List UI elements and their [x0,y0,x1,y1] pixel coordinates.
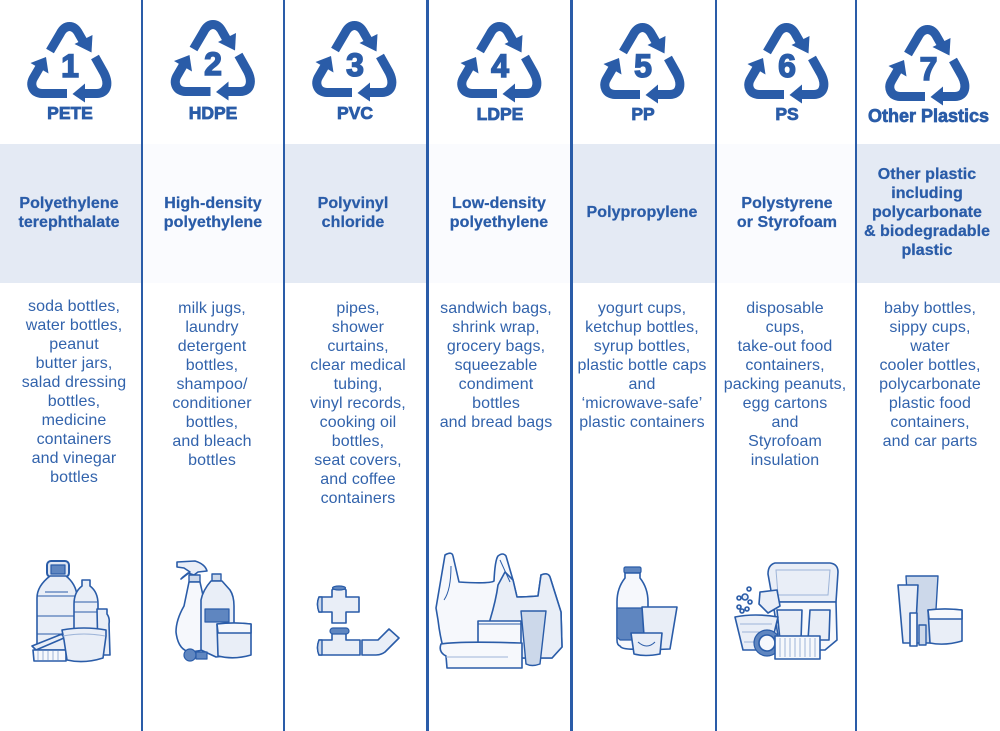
name: Low-density polyethylene: Low-density [452,195,546,212]
uses: column 3: cooking oil [320,414,396,431]
uses: column 3 [310,300,406,507]
name: Other plastic: Other plastic [878,166,976,183]
uses: column 5: plastic containers [579,414,705,431]
uses: column 2: and bleach [172,433,252,450]
uses: column 2: conditioner [172,395,252,412]
uses: column 4: sandwich bags, [440,300,552,317]
code 2 HDPE [174,24,250,123]
name: Polyethylene terephthalate: Polyethylene [19,195,119,212]
uses: column 4: shrink wrap, [452,319,540,336]
uses: column 4: and bread bags [440,414,552,431]
name: Other plastic [864,166,990,259]
uses: column 5: ketchup bottles, [585,319,699,336]
band: column 1 name background [0,144,142,283]
code 2 HDPE: HDPE [189,103,237,123]
uses: column 7 [879,300,981,450]
uses: column 6: containers, [745,357,825,374]
name: Polyvinyl chloride [318,195,388,231]
name: Low-density polyethylene [450,195,548,231]
uses: column 7: cooler bottles, [879,357,981,374]
code 4 LDPE: 4 [491,48,509,84]
name: Polystyrene or Styrofoam: or Styrofoam [737,214,837,231]
name: High-density polyethylene [164,195,262,231]
uses: column 1: salad dressing [22,374,126,391]
name: Other plastic: including [891,185,963,202]
name: Polyethylene terephthalate: terephthalate [18,214,120,231]
illustration: PVC pipes [318,586,399,655]
code 3 PVC [316,26,392,123]
uses: column 6: disposable [746,300,824,317]
uses: column 6: egg cartons [743,395,827,412]
uses: column 3: pipes, [336,300,380,317]
uses: column 6: and [772,414,798,431]
code 7 Other Plastics: Other Plastics [868,106,989,126]
name: Polystyrene or Styrofoam: Polystyrene [741,195,833,212]
uses: column 1: and vinegar [32,450,116,467]
name: High-density polyethylene: High-density [164,195,262,212]
name: Other plastic: & biodegradable [864,223,990,240]
band: column 3 name background [284,144,427,283]
uses: column 7: baby bottles, [884,300,976,317]
uses: column 2: laundry [185,319,239,336]
uses: column 2: bottles [188,452,236,469]
illustration: PP containers [617,567,677,656]
uses: column 4: condiment [459,376,533,393]
code 3 PVC: PVC [337,103,373,123]
code 6 PS: PS [775,104,799,124]
code 1 PETE: PETE [47,103,93,123]
uses: column 1: butter jars, [36,355,112,372]
uses: column 3: vinyl records, [310,395,406,412]
code 7 Other Plastics: 7 [920,51,937,87]
name: Polypropylene: Polypropylene [587,204,697,221]
uses: column 6 [724,300,846,469]
uses: column 1: soda bottles, [28,298,120,315]
uses: column 1: containers [37,431,111,448]
uses: column 3: bottles, [332,433,384,450]
uses: column 4: bottles [472,395,520,412]
uses: column 1: water bottles, [26,317,122,334]
uses: column 6: take-out food [738,338,832,355]
uses: column 5: plastic bottle caps [577,357,707,374]
name: Low-density polyethylene: polyethylene [450,214,548,231]
band: column 7 name background [855,144,1000,283]
uses: column 1: medicine [42,412,106,429]
uses: column 2: shampoo/ [176,376,248,393]
name: Polyvinyl chloride: Polyvinyl [318,195,388,212]
band: column 2 name background [142,144,284,283]
code 3 PVC: 3 [346,47,364,83]
uses: column 1: peanut [49,336,99,353]
band: column 4 name background [427,144,571,283]
uses: column 4: grocery bags, [447,338,545,355]
name: Polystyrene or Styrofoam [737,195,837,231]
uses: column 3: and coffee [320,471,396,488]
illustration: PS foam items [735,563,838,659]
band: column 5 name background [571,144,715,283]
uses: column 7: sippy cups, [889,319,971,336]
code 4 LDPE: LDPE [477,104,523,124]
name: Polyethylene terephthalate [18,195,120,231]
uses: column 7: containers, [890,414,970,431]
code 6 PS: 6 [778,48,796,84]
uses: column 2: milk jugs, [178,300,246,317]
uses: column 7: water [910,338,950,355]
uses: column 5: syrup bottles, [594,338,690,355]
illustration: LDPE bags [436,553,562,668]
uses: column 2 [172,300,252,469]
uses: column 6: insulation [751,452,819,469]
uses: column 5: and [628,376,656,393]
uses: column 7: and car parts [883,433,977,450]
uses: column 2: bottles, [186,357,238,374]
uses: column 3: shower [332,319,384,336]
uses: column 3: containers [321,490,395,507]
uses: column 5: yogurt cups, [598,300,686,317]
band: column 6 name background [715,144,855,283]
uses: column 6: Styrofoam [748,433,822,450]
code 7 Other Plastics [868,30,989,126]
illustration: HDPE bottles [176,561,251,661]
code 6 PS [748,28,824,124]
uses: column 5 [577,300,707,431]
name: High-density polyethylene: polyethylene [164,214,262,231]
uses: column 2: bottles, [186,414,238,431]
code 4 LDPE [460,26,537,124]
code 5 PP: 5 [634,48,652,84]
uses: column 7: polycarbonate [879,376,981,393]
uses: column 6: packing peanuts, [724,376,846,393]
illustration: PETE bottles [32,561,110,662]
uses: column 3: clear medical [310,357,406,374]
name: Other plastic: plastic [901,242,953,259]
uses: column 3: curtains, [327,338,389,355]
name: Other plastic: polycarbonate [872,204,982,221]
uses: column 3: tubing, [334,376,382,393]
uses: column 1: bottles [50,469,98,486]
uses: column 4 [440,300,552,431]
name: Polyvinyl chloride: chloride [322,214,384,231]
code 5 PP: PP [631,104,655,124]
code 5 PP [604,28,680,124]
uses: column 5: ‘microwave-safe’ [582,395,702,412]
uses: column 2: detergent [178,338,246,355]
uses: column 3: seat covers, [314,452,402,469]
illustration: other plastics [898,576,962,646]
code 1 PETE [30,26,107,123]
code 2 HDPE: 2 [204,46,222,82]
code 1 PETE: 1 [61,48,79,84]
uses: column 4: squeezable [455,357,537,374]
uses: column 7: plastic food [889,395,971,412]
uses: column 6: cups, [766,319,804,336]
uses: column 1: bottles, [48,393,100,410]
uses: column 1 [22,298,126,486]
